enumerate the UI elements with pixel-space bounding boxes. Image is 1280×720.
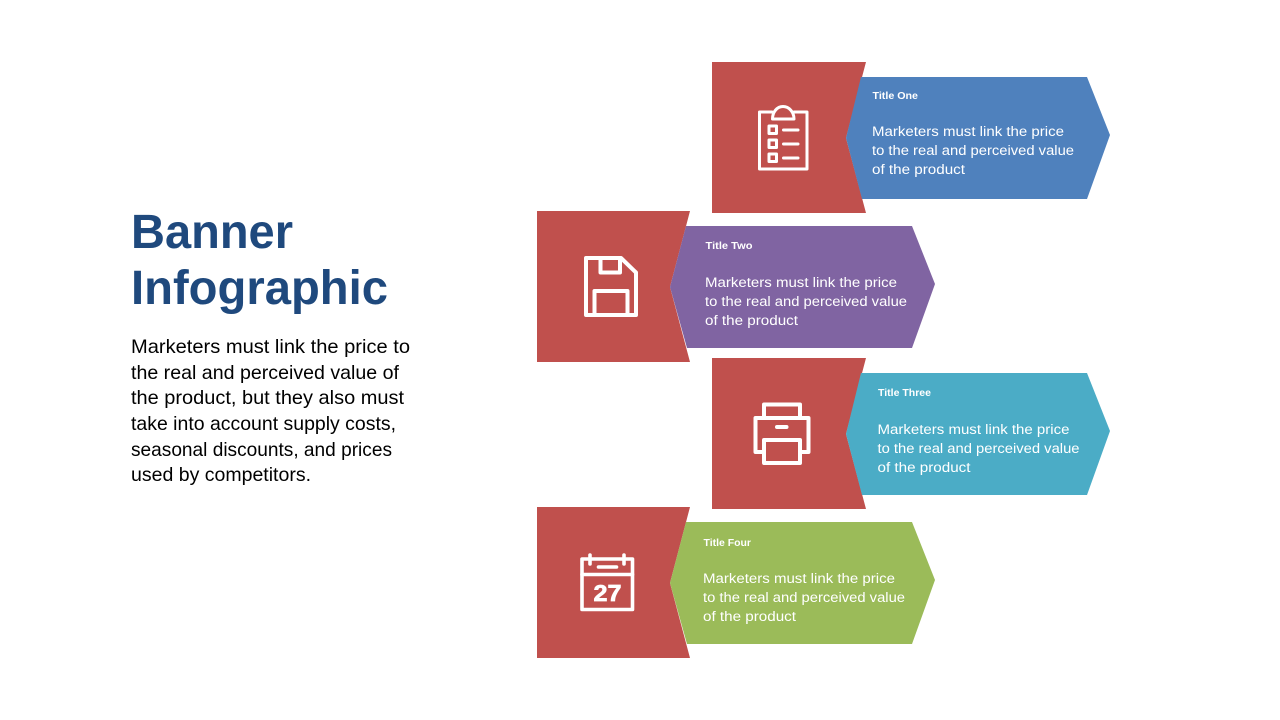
- card two text: to the real and perceived value: [705, 294, 907, 309]
- card two text: Marketers must link the price: [705, 275, 897, 290]
- title: [131, 206, 388, 315]
- green arrow four: [670, 522, 935, 644]
- intro text block: the real and perceived value of: [131, 362, 400, 384]
- card two text: Title Two: [706, 240, 752, 252]
- icon: clipboard checklist: [760, 106, 807, 169]
- card three text: [878, 387, 1080, 475]
- card two text: of the product: [705, 313, 798, 328]
- card one text: Title One: [872, 90, 918, 102]
- icon: floppy disk: [586, 258, 636, 315]
- intro text block: the product, but they also must: [131, 387, 405, 409]
- title: Banner: [131, 206, 293, 259]
- card three text: Marketers must link the price: [878, 422, 1070, 437]
- panel: title one: [712, 62, 1110, 213]
- card one text: to the real and perceived value: [872, 143, 1074, 158]
- intro text block: used by competitors.: [131, 464, 311, 486]
- panel: title three: [712, 358, 1110, 509]
- card four text: to the real and perceived value: [703, 590, 905, 605]
- intro text block: [131, 336, 410, 486]
- panel: title four: [537, 507, 935, 658]
- card four text: of the product: [703, 609, 796, 624]
- intro text block: take into account supply costs,: [131, 413, 396, 435]
- purple arrow two: [670, 226, 935, 348]
- card one text: Marketers must link the price: [872, 124, 1064, 139]
- blue arrow one: [846, 77, 1110, 199]
- teal arrow three: [846, 373, 1110, 495]
- card four text: Marketers must link the price: [703, 571, 895, 586]
- icon: calendar: 27: [594, 580, 622, 606]
- card four text: [703, 537, 905, 624]
- intro text block: Marketers must link the price to: [131, 336, 410, 358]
- icon: printer: [756, 404, 808, 463]
- card three text: of the product: [878, 460, 971, 475]
- panel: title two: [537, 211, 935, 362]
- card one text: [872, 90, 1074, 177]
- red banner one: [712, 62, 866, 213]
- card one text: of the product: [872, 162, 965, 177]
- card four text: Title Four: [704, 537, 751, 549]
- title: Infographic: [131, 262, 388, 315]
- intro text block: seasonal discounts, and prices: [131, 439, 392, 461]
- card two text: [705, 240, 907, 328]
- red banner four: [537, 507, 690, 658]
- icon: calendar: [582, 555, 632, 610]
- red banner three: [712, 358, 866, 509]
- card three text: Title Three: [878, 387, 931, 399]
- red banner two: [537, 211, 690, 362]
- card three text: to the real and perceived value: [878, 441, 1080, 456]
